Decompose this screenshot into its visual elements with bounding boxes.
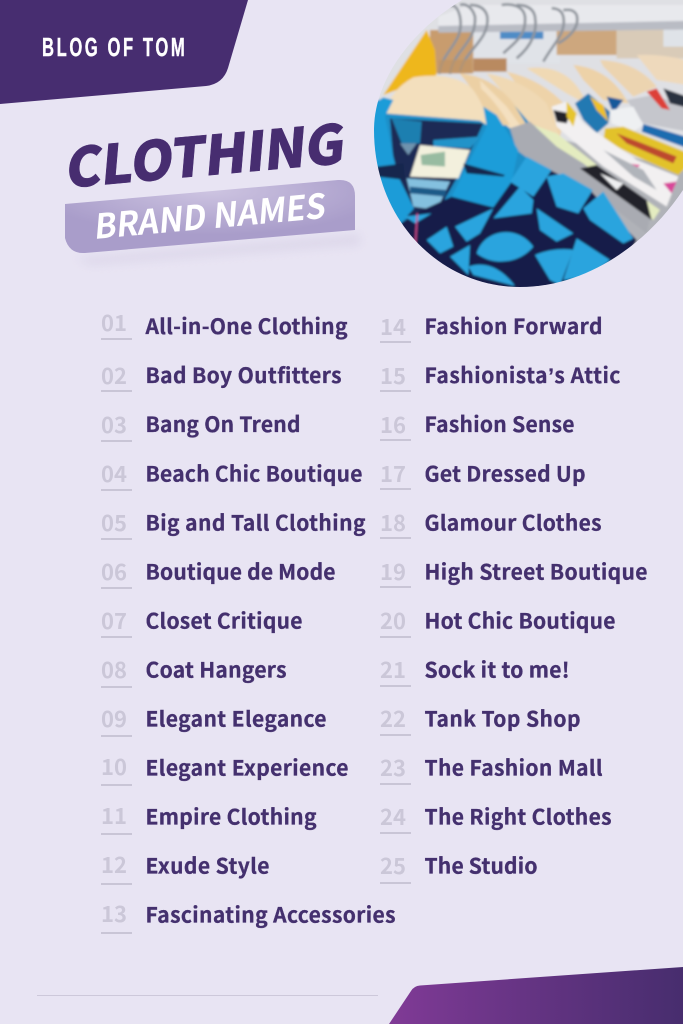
main shirt body bbox=[400, 170, 637, 300]
item 02: 02 bbox=[101, 359, 127, 391]
item 23: The Fashion Mall bbox=[424, 752, 603, 782]
item 06: Boutique de Mode bbox=[146, 556, 336, 586]
item 09 bbox=[101, 702, 326, 737]
shirt inner neck bbox=[390, 118, 483, 217]
item 20: Hot Chic Boutique bbox=[424, 606, 616, 636]
right garments bbox=[627, 95, 683, 133]
left column list bbox=[101, 306, 396, 934]
item 13 bbox=[101, 897, 396, 934]
item 03: 03 bbox=[101, 408, 127, 440]
item 08: Coat Hangers bbox=[146, 654, 286, 684]
item 05: 05 bbox=[101, 506, 127, 538]
front hanger bbox=[385, 76, 488, 126]
item 17: Get Dressed Up bbox=[424, 458, 586, 488]
item 03 bbox=[101, 408, 300, 442]
item 25: The Studio bbox=[424, 850, 538, 880]
title: clothing: CLOTHING bbox=[64, 100, 349, 204]
item 18: Glamour Clothes bbox=[424, 508, 602, 538]
item 14: Fashion Forward bbox=[424, 311, 602, 341]
item 22 bbox=[380, 702, 580, 736]
header ribbon bbox=[0, 0, 248, 104]
blog name: BLOG OF TOM bbox=[42, 32, 185, 62]
item 21 bbox=[380, 653, 570, 687]
item 21: 21 bbox=[380, 653, 406, 685]
right collar bbox=[452, 107, 518, 207]
item 09: Elegant Elegance bbox=[146, 704, 326, 734]
item 19: 19 bbox=[380, 555, 406, 587]
item 07: Closet Critique bbox=[146, 606, 302, 636]
item 21: Sock it to me! bbox=[424, 654, 570, 684]
photo: clothes on hangers bbox=[374, 0, 683, 287]
item 15: 15 bbox=[380, 359, 406, 391]
subtitle text: BRAND NAMES bbox=[93, 178, 328, 249]
item 13: Fascinating Accessories bbox=[146, 900, 396, 930]
item 07: 07 bbox=[101, 604, 127, 636]
item 13: 13 bbox=[101, 897, 127, 929]
back hangers bbox=[637, 55, 683, 87]
item 12: Exude Style bbox=[146, 850, 270, 880]
silver hanger hooks bbox=[439, 4, 577, 74]
item 09: 09 bbox=[101, 702, 127, 734]
item 10 bbox=[101, 750, 348, 786]
item 05: Big and Tall Clothing bbox=[146, 508, 366, 538]
item 04: Beach Chic Boutique bbox=[146, 458, 362, 488]
item 17: 17 bbox=[380, 457, 406, 489]
item 03: Bang On Trend bbox=[146, 409, 300, 439]
item 12 bbox=[101, 848, 270, 885]
item 08: 08 bbox=[101, 653, 127, 685]
item 11 bbox=[101, 799, 317, 835]
item 07 bbox=[101, 604, 302, 638]
item 18: 18 bbox=[380, 506, 406, 538]
backdrop bbox=[378, 0, 683, 169]
item 24: 24 bbox=[380, 800, 406, 832]
item 08 bbox=[101, 653, 286, 688]
right column list bbox=[380, 310, 648, 884]
item 10: Elegant Experience bbox=[146, 752, 348, 782]
footer ribbon bbox=[389, 967, 683, 1024]
subtitle banner bbox=[65, 178, 360, 265]
item 22: Tank Top Shop bbox=[424, 704, 580, 734]
item 12: 12 bbox=[101, 848, 127, 880]
footer rule bbox=[37, 995, 378, 996]
rail bbox=[440, 6, 683, 25]
item 22: 22 bbox=[380, 702, 406, 734]
item 25 bbox=[380, 849, 538, 884]
item 01: All-in-One Clothing bbox=[144, 311, 348, 341]
item 16: Fashion Sense bbox=[424, 409, 574, 439]
item 02: Bad Boy Outfitters bbox=[146, 360, 342, 390]
item 16: 16 bbox=[380, 408, 406, 440]
item 15: Fashionista’s Attic bbox=[424, 360, 620, 390]
left collar bbox=[374, 96, 416, 222]
item 04: 04 bbox=[101, 457, 127, 489]
item 01: 01 bbox=[101, 306, 127, 338]
item 06: 06 bbox=[101, 555, 127, 587]
item 14: 14 bbox=[380, 310, 406, 342]
blue leaf shapes bbox=[510, 157, 552, 197]
item 11: Empire Clothing bbox=[146, 802, 317, 832]
item 23: 23 bbox=[380, 751, 406, 783]
item 25: 25 bbox=[380, 849, 406, 881]
item 24: The Right Clothes bbox=[424, 802, 612, 832]
item 20: 20 bbox=[380, 604, 406, 636]
item 19: High Street Boutique bbox=[424, 556, 648, 586]
label bbox=[410, 145, 470, 178]
item 11: 11 bbox=[101, 799, 127, 831]
item 10: 10 bbox=[101, 750, 127, 782]
